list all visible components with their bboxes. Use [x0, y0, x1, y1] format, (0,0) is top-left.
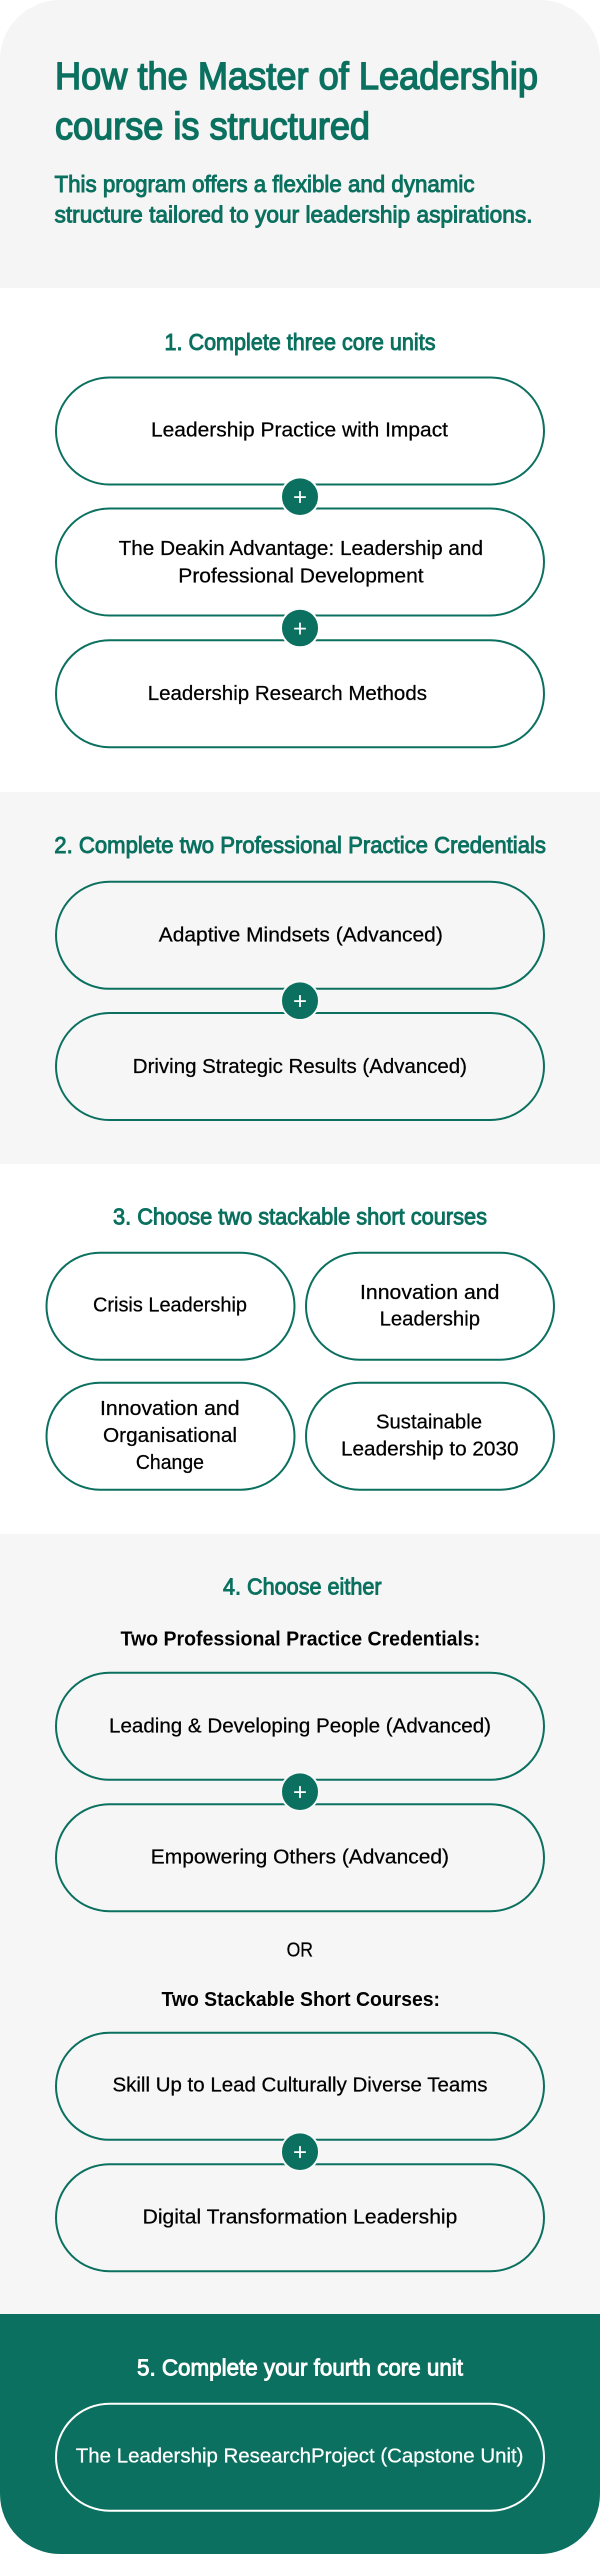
icon: plus connector: [281, 1772, 319, 1811]
pill: Leadership Practice with Impact: [56, 378, 544, 484]
pill: Empowering Others: Empowering Others (Advanced): [151, 1846, 449, 1869]
icon: plus connector: [281, 981, 319, 1020]
pill: The Deakin Advantage: [56, 508, 544, 616]
pill: The Deakin Advantage: Professional Development: [178, 564, 424, 587]
pill: Crisis Leadership: [46, 1253, 294, 1360]
pill: Driving Strategic Results: Driving Strategic Results (Advanced): [133, 1055, 467, 1078]
icon: plus connector: +: [293, 615, 307, 642]
title: How the Master of Leadership: [55, 56, 538, 98]
icon: plus connector: +: [293, 988, 307, 1015]
icon: plus connector: +: [293, 2139, 307, 2166]
pill: Innovation and Organisational Change: Innovation and: [100, 1397, 240, 1420]
subheading: credentials option: Two Professional Practice Credentials:: [120, 1628, 480, 1651]
pill: Digital Transformation Leadership: [56, 2164, 544, 2271]
icon: plus connector: +: [293, 1779, 307, 1806]
subheading: short courses option: Two Stackable Short Courses:: [162, 1988, 440, 2011]
pill: capstone unit: The Leadership ResearchProject (Capstone Unit): [76, 2445, 524, 2468]
pill: Leading and Developing People: [56, 1673, 544, 1780]
pill: Leadership Research Methods: Leadership Research Methods: [148, 682, 427, 705]
panel: step 4 choose either: [0, 1534, 600, 2314]
pill: Innovation and Leadership: Leadership: [380, 1308, 480, 1331]
pill: Driving Strategic Results: [56, 1013, 544, 1120]
pill: Innovation and Organisational Change: [46, 1383, 294, 1490]
heading: step 3: 3. Choose two stackable short courses: [113, 1203, 487, 1229]
pill: Leading and Developing People: Leading & Developing People (Advanced): [109, 1715, 491, 1738]
title: [55, 56, 538, 148]
pill: Leadership Practice with Impact: Leadership Practice with Impact: [151, 419, 448, 442]
pill: Skill Up: [56, 2033, 544, 2140]
pill: Sustainable Leadership to 2030: [306, 1383, 554, 1490]
icon: plus connector: [281, 477, 319, 516]
heading: step 2: 2. Complete two Professional Practice Credentials: [54, 832, 546, 858]
panel: step 2 credentials: [0, 792, 600, 1164]
panel: header: [0, 0, 600, 288]
pill: Digital Transformation Leadership: Digital Transformation Leadership: [143, 2206, 457, 2229]
pill: Leadership Research Methods: [56, 640, 544, 747]
pill: capstone unit: [56, 2404, 544, 2511]
pill: Skill Up: Skill Up to Lead Culturally Diverse Teams: [112, 2074, 488, 2097]
text: OR: OR: [287, 1939, 313, 1962]
icon: plus connector: [281, 2132, 319, 2171]
subtitle: [54, 171, 532, 228]
pill: Sustainable Leadership to 2030: Sustainable: [376, 1411, 482, 1434]
panel: step 3 short courses: [0, 1164, 600, 1534]
title: course is structured: [55, 106, 370, 148]
heading: step 4: 4. Choose either: [223, 1573, 382, 1599]
heading: step 1: 1. Complete three core units: [164, 329, 436, 355]
icon: plus connector: +: [293, 484, 307, 511]
pill: Innovation and Leadership: [306, 1253, 554, 1360]
icon: plus connector: [281, 609, 319, 647]
pill: Empowering Others: [56, 1804, 544, 1911]
panel: step 1 core units: [0, 288, 600, 792]
pill: Sustainable Leadership to 2030: Leadership to 2030: [341, 1438, 518, 1461]
panel: step 5 capstone: [0, 2314, 600, 2554]
heading: step 5: 5. Complete your fourth core unit: [137, 2355, 464, 2381]
pill: Innovation and Organisational Change: Change: [136, 1451, 204, 1474]
pill: The Deakin Advantage: The Deakin Advantage: Leadership and: [119, 537, 483, 560]
pill: Innovation and Leadership: Innovation and: [360, 1281, 499, 1304]
pill: Adaptive Mindsets: [56, 882, 544, 989]
pill: Adaptive Mindsets: Adaptive Mindsets (Advanced): [159, 924, 443, 947]
pill: Innovation and Organisational Change: Organisational: [103, 1424, 237, 1447]
pill: Crisis Leadership: Crisis Leadership: [93, 1294, 247, 1317]
subtitle: structure tailored to your leadership aspirations.: [54, 202, 532, 228]
subtitle: This program offers a flexible and dynamic: [54, 171, 475, 197]
